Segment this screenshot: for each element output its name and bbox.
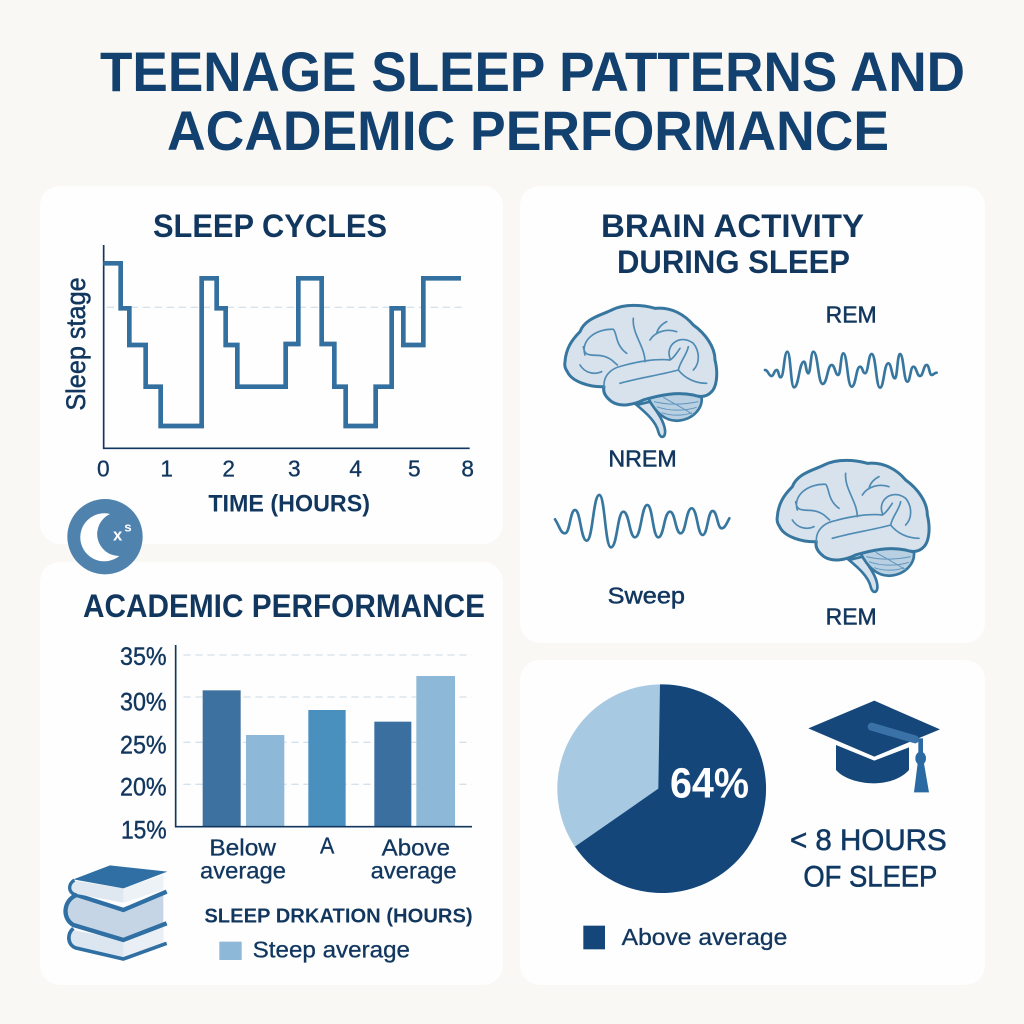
heading: brain activity: BRAIN ACTIVITY [601,208,864,244]
label: REM bottom: REM [826,603,877,629]
icon: brain bottom [777,460,929,592]
icon: moon badge: s [124,519,132,534]
y axis labels: 25% [120,732,167,759]
callout: hours of sleep [790,824,947,894]
x axis labels [200,832,457,883]
panel: sleep cycles [40,186,503,544]
callout: hours of sleep: OF SLEEP [803,861,937,894]
legend: Above average [622,924,787,950]
panel: academic performance [40,562,503,985]
x axis ticks: 2 [222,456,235,482]
x axis ticks: 1 [160,456,173,482]
y axis labels: 30% [120,690,167,717]
y axis labels: 35% [120,644,167,671]
wave: NREM [555,495,729,547]
title: TEENAGE SLEEP PATTERNS AND [100,40,965,103]
panel: brain activity [520,186,985,643]
x axis ticks: 0 [97,456,110,482]
icon: books [66,865,167,959]
icon: moon badge: x [113,526,123,545]
label: Sweep: Sweep [608,582,685,608]
heading: brain activity [601,208,864,280]
icon: brain top [565,305,717,437]
y axis labels [120,644,167,844]
heading: brain activity: DURING SLEEP [617,244,850,280]
y axis labels: 15% [121,817,167,844]
x axis ticks: 4 [349,456,362,482]
brain activity content [555,301,937,629]
icon: graduation cap [808,701,940,792]
bars [203,676,455,826]
pie value: 64% [670,759,749,807]
panel: sleep statistic [520,660,985,985]
heading: academic performance: ACADEMIC PERFORMANCE [83,588,485,624]
x axis ticks: 3 [288,456,301,482]
title: ACADEMIC PERFORMANCE [167,99,889,162]
x axis labels: Above [382,835,450,861]
icon: moon badge [67,499,143,574]
label: REM top: REM [826,301,877,327]
callout: hours of sleep: < 8 HOURS [790,824,947,857]
x axis labels: Below [209,835,276,861]
bar chart [66,644,473,962]
heading: sleep cycles: SLEEP CYCLES [153,208,387,244]
x axis title: SLEEP DRKATION (HOURS) [204,906,473,928]
title [100,40,965,162]
x axis labels: average [200,857,286,883]
wave: REM [765,352,937,388]
x axis ticks: 8 [461,456,474,482]
y axis labels: 20% [120,775,167,802]
x axis labels: average [371,857,457,883]
y axis label: Sleep stage [61,277,91,411]
legend: Steep average [253,936,410,962]
line chart: sleep stages over time [61,245,474,518]
x axis ticks: 5 [408,456,421,482]
x axis labels: A [320,832,335,858]
x axis ticks [97,456,474,482]
pie chart [557,684,766,893]
label: NREM: NREM [608,446,677,472]
x axis title: TIME (HOURS) [208,491,370,518]
